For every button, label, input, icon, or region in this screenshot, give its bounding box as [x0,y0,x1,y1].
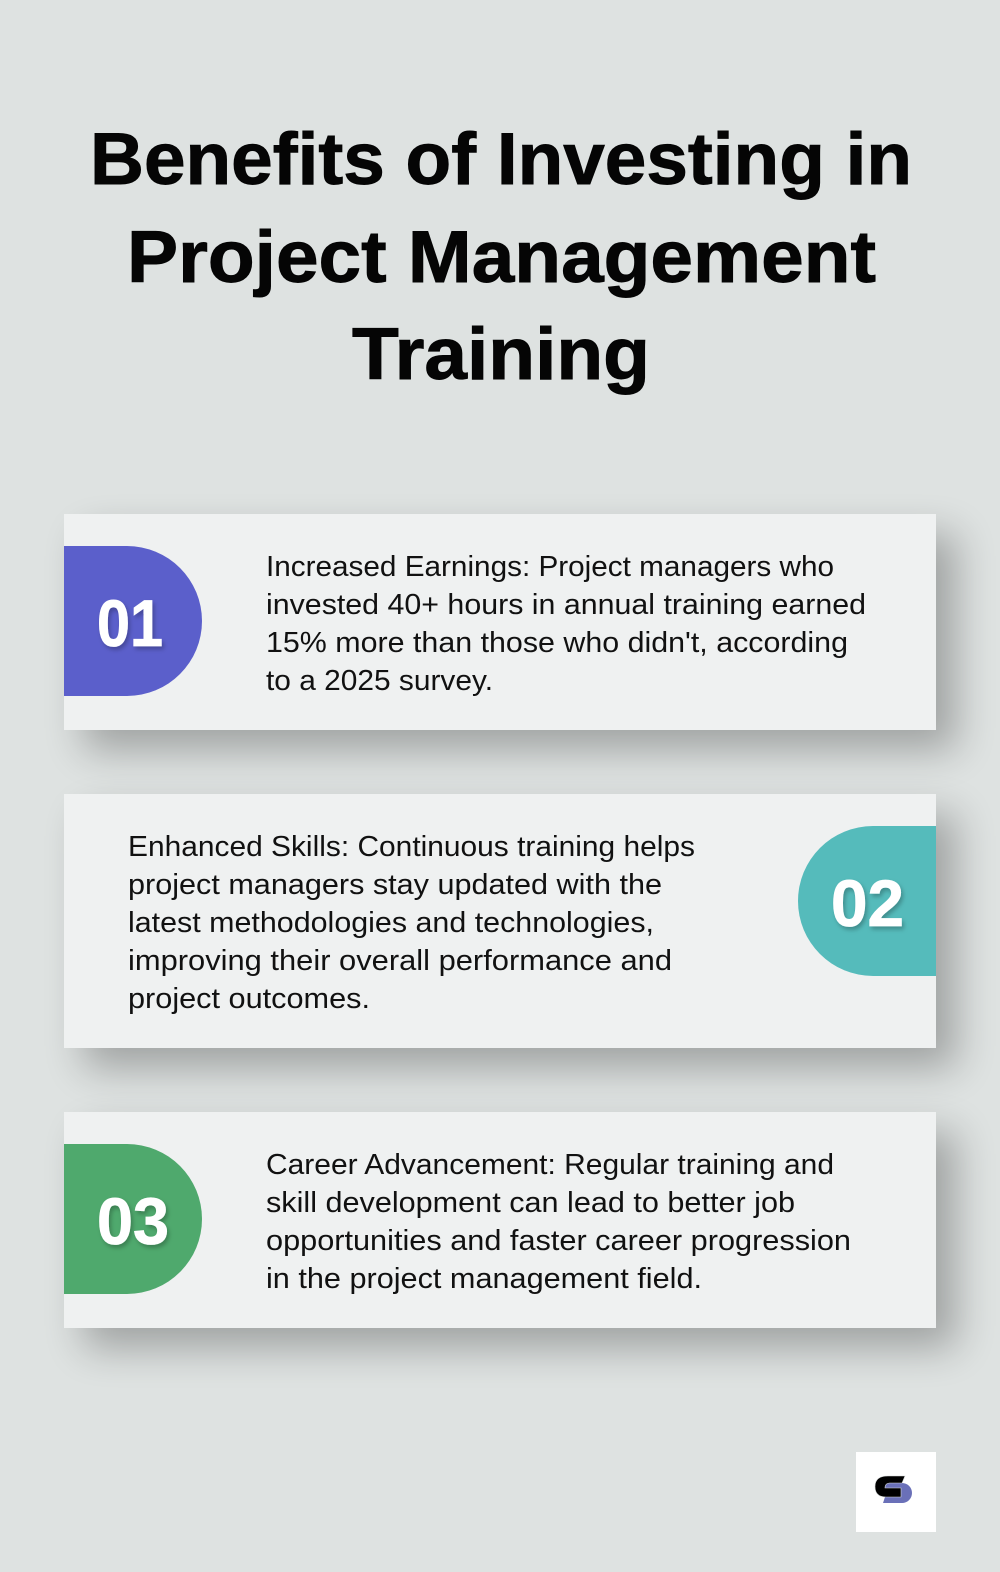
text: career advancement: in the project management field. [266,1263,702,1295]
text: enhanced skills: Enhanced Skills: Continuous training helps [128,831,695,863]
text: enhanced skills: latest methodologies and technologies, [128,907,654,939]
badge: 01: 01 [97,586,163,660]
text: enhanced skills: project outcomes. [128,983,370,1015]
badge: 01 [64,546,202,696]
text: increased earnings: 15% more than those who didn't, according [266,627,848,659]
text: career advancement: Career Advancement: Regular training and [266,1149,834,1181]
text: career advancement: skill development can lead to better job [266,1187,795,1219]
text: increased earnings: invested 40+ hours in annual training earned [266,589,866,621]
badge: 02 [798,826,936,976]
badge: 03: 03 [97,1184,169,1258]
text: increased earnings [266,551,866,697]
title: Benefits of Investing in [90,119,912,200]
text: increased earnings: Increased Earnings: Project managers who [266,551,834,583]
title [90,119,912,395]
title: Project Management [127,217,876,298]
badge: 03 [64,1144,202,1294]
text: enhanced skills: project managers stay updated with the [128,869,662,901]
title: Training [352,314,650,395]
panel: career advancement [64,1112,956,1348]
panel: increased earnings [64,514,956,750]
text: career advancement [266,1149,851,1295]
text: increased earnings: to a 2025 survey. [266,665,493,697]
text: enhanced skills: improving their overall performance and [128,945,672,977]
text: enhanced skills [128,831,695,1015]
badge: 02: 02 [831,866,904,940]
panel: enhanced skills [64,794,956,1068]
text: career advancement: opportunities and faster career progression [266,1225,851,1257]
logo [856,1452,936,1532]
